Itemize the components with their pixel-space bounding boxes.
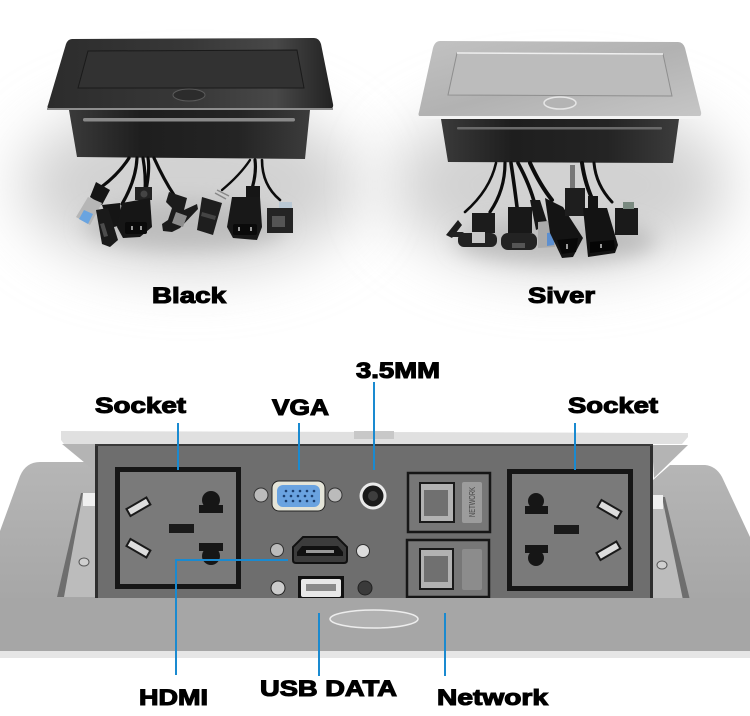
right recess (653, 497, 690, 600)
silver lid button (544, 97, 576, 109)
silver lid panel (448, 53, 672, 96)
callout lines (176, 382, 575, 676)
network module bottom (407, 540, 489, 597)
dark face panel (95, 444, 653, 598)
base front edge (0, 651, 750, 658)
network module top: NETWORK (468, 487, 477, 517)
label: Black: Black (152, 283, 227, 308)
black connector: power 2 (227, 186, 262, 240)
black top plate (47, 38, 333, 109)
product photo: silver box (418, 41, 702, 258)
lid top bar (61, 431, 688, 444)
black connector: audio jack (135, 187, 152, 200)
left lid side (62, 444, 96, 472)
right lid side (652, 445, 688, 478)
black slot (83, 118, 295, 122)
label: Network: Network (437, 685, 549, 710)
label: Socket right: Socket (568, 393, 659, 418)
silver housing (441, 119, 679, 163)
black connector: RJ45 (197, 190, 229, 235)
silver connector: USB (458, 213, 497, 247)
black connector: RJ45 2 (267, 202, 293, 233)
base plate (0, 462, 750, 658)
silver connector: HDMI panel (501, 207, 537, 250)
product photo: open panel (0, 431, 750, 658)
silver cables (465, 163, 612, 215)
silver connector: RJ45 (565, 165, 585, 216)
black lid button (173, 89, 205, 101)
3.5mm jack (360, 482, 386, 510)
silver connector: power 2 (583, 196, 618, 257)
pin slots (597, 500, 621, 518)
background shadows (20, 100, 730, 270)
right socket (510, 472, 630, 588)
left recess screw (79, 558, 89, 566)
label: Socket left: Socket (95, 393, 187, 418)
front button (330, 610, 418, 628)
USB port (271, 576, 372, 598)
label: Siver: Siver (528, 283, 596, 308)
silver connector: RJ45 2 (615, 202, 638, 235)
VGA port (254, 481, 342, 511)
label: HDMI: HDMI (139, 685, 208, 710)
silver slot (457, 127, 662, 130)
pin slots (126, 498, 150, 516)
silver connector: small plug (446, 220, 464, 238)
black connector: USB panel (162, 192, 198, 232)
black housing (69, 110, 310, 159)
left recess (57, 493, 95, 597)
label: VGA: VGA (272, 395, 329, 420)
label: USB DATA: USB DATA (260, 676, 397, 701)
network module top (408, 473, 490, 532)
black connector: HDMI panel (96, 203, 122, 247)
black connector: VGA (76, 182, 110, 225)
product photo: black box (47, 38, 333, 247)
silver top plate (418, 41, 701, 117)
label: 3.5MM: 3.5MM (356, 358, 440, 383)
silver connector: VGA (530, 200, 557, 248)
front plate (0, 598, 750, 651)
left socket (118, 470, 238, 586)
HDMI port (270, 537, 370, 563)
black lid panel (78, 50, 304, 88)
right recess screw (657, 561, 667, 569)
black cables (100, 158, 280, 204)
silver connector: power (545, 198, 583, 258)
black connector: power (117, 198, 152, 238)
